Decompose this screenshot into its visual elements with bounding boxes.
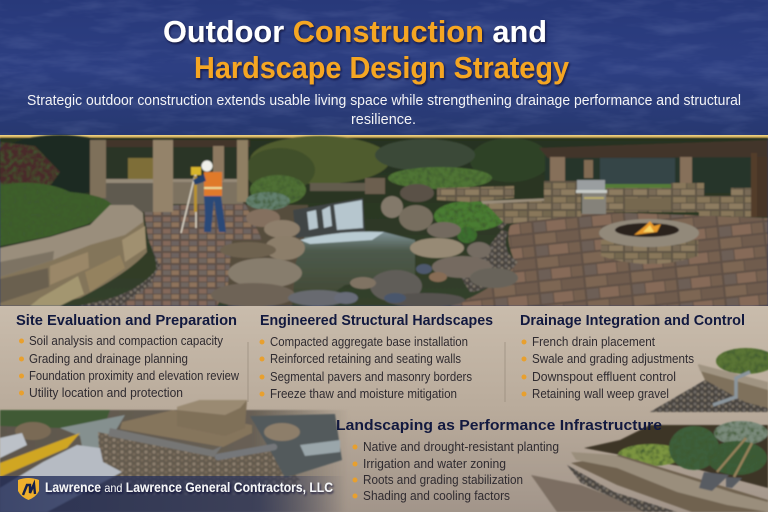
shovels bbox=[717, 438, 752, 477]
bullet list: Swale and grading adjustments bbox=[532, 352, 694, 366]
title: Outdoor Construction and bbox=[163, 14, 547, 49]
subtitle: Strategic outdoor construction extends usable living space while strengthening drainage performance and structural bbox=[27, 93, 741, 109]
bullet list: Shading and cooling factors bbox=[363, 489, 510, 503]
company name: Lawrence and Lawrence General Contractors, LLC bbox=[45, 480, 333, 495]
surveyor with tripod bbox=[181, 160, 226, 233]
section: landscaping performance bbox=[336, 417, 662, 503]
bullet list: Segmental pavers and masonry borders bbox=[270, 370, 472, 384]
bullet list: Compacted aggregate base installation bbox=[270, 335, 468, 349]
ground behind rocks bbox=[228, 205, 308, 306]
blueprints bbox=[0, 445, 122, 512]
panel: drainage illustration bbox=[650, 348, 768, 412]
grill bbox=[576, 180, 607, 214]
heading: Landscaping as Performance Infrastructure bbox=[336, 417, 662, 434]
shrubs near waterfall bbox=[246, 167, 506, 243]
panel: text section background bbox=[0, 306, 768, 512]
bullet list: Retaining wall weep gravel bbox=[532, 387, 669, 401]
waterfall and pond bbox=[292, 178, 415, 306]
bullet list bbox=[19, 334, 240, 400]
paver stack bbox=[177, 400, 247, 436]
bullet list: Irrigation and water zoning bbox=[363, 457, 506, 471]
section: engineered hardscapes bbox=[260, 312, 493, 401]
bullet list: Grading and drainage planning bbox=[29, 352, 188, 366]
section: drainage integration bbox=[520, 312, 745, 401]
heading: Engineered Structural Hardscapes bbox=[260, 312, 493, 329]
company logo band bbox=[0, 476, 345, 512]
bullet list bbox=[352, 440, 559, 503]
patio pavers bbox=[450, 212, 768, 306]
pond rocks bbox=[211, 184, 518, 307]
subtitle bbox=[27, 93, 741, 128]
background trees bbox=[0, 135, 550, 195]
bullet list: Soil analysis and compaction capacity bbox=[29, 334, 224, 348]
terraced stone walls bbox=[437, 186, 557, 224]
gravel strip bbox=[78, 236, 160, 306]
paver base bbox=[120, 410, 252, 447]
bullet list: Native and drought-resistant planting bbox=[363, 440, 559, 454]
gold divider bbox=[0, 135, 768, 138]
bullet list: Reinforced retaining and seating walls bbox=[270, 352, 461, 366]
curved paver walkway bbox=[118, 203, 262, 306]
greenery and stream bbox=[0, 410, 110, 428]
bullet list bbox=[260, 335, 472, 401]
bullet list: Roots and grading stabilization bbox=[363, 473, 523, 487]
foliage left bbox=[0, 142, 112, 246]
bullet list: Foundation proximity and elevation review bbox=[29, 369, 240, 383]
panel: hero photo of outdoor construction bbox=[0, 135, 768, 307]
title: Hardscape Design Strategy bbox=[194, 50, 570, 85]
column dividers bbox=[248, 342, 505, 402]
bullet list: Freeze thaw and moisture mitigation bbox=[270, 387, 457, 401]
heading: Site Evaluation and Preparation bbox=[16, 312, 237, 329]
panel: header bbox=[0, 0, 768, 136]
left pavilion bbox=[90, 140, 250, 212]
bullet list: Downspout effluent control bbox=[532, 370, 676, 384]
drainage pipe bbox=[218, 447, 274, 457]
bullet list: French drain placement bbox=[532, 335, 655, 349]
level bbox=[0, 433, 80, 477]
bullet list bbox=[522, 335, 694, 401]
icon: shield logo bbox=[18, 478, 39, 500]
panel: construction base illustration bbox=[0, 400, 350, 512]
heading: Drainage Integration and Control bbox=[520, 312, 745, 329]
subtitle: resilience. bbox=[351, 112, 416, 128]
section: site evaluation bbox=[16, 312, 240, 400]
panel: planter illustration bbox=[531, 421, 768, 512]
curved retaining wall bbox=[0, 205, 147, 306]
fire pit bbox=[599, 219, 699, 264]
bullet list: Utility location and protection bbox=[29, 386, 183, 400]
gravel bed bbox=[98, 432, 300, 495]
right pergola bbox=[539, 140, 768, 217]
title bbox=[163, 14, 570, 85]
